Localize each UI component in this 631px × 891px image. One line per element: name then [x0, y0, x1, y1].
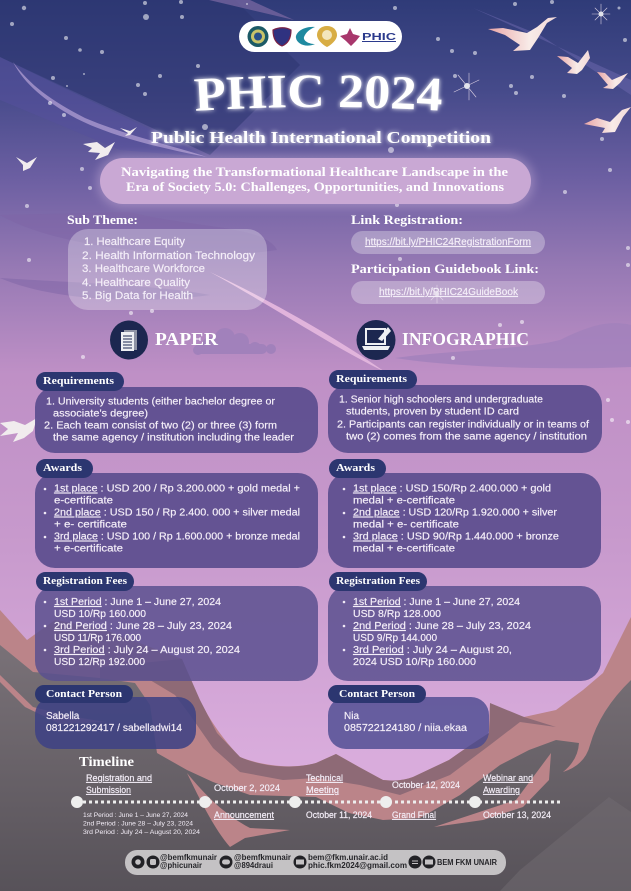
- sub theme list: 3. Healthcare Workforce: [82, 263, 205, 275]
- panel: paper contact person: Sabella: [46, 711, 80, 722]
- panel: infographic registration fees: USD 9/Rp 144.000: [353, 633, 437, 644]
- milestone: technical meeting: October 11, 2024: [306, 810, 372, 820]
- footer social bar: [125, 850, 506, 875]
- timeline: [71, 754, 560, 836]
- milestone: registration and submission: 1st Period : June 1 – June 27, 2024: [83, 813, 189, 819]
- registration fees tag: Registration Fees: [336, 575, 421, 587]
- registration fees tag: Registration Fees: [43, 575, 128, 587]
- panel: infographic requirements: 1. Senior high schoolers and undergraduate: [339, 394, 543, 406]
- sub theme list: 5. Big Data for Health: [82, 290, 193, 302]
- milestone: announcement: [214, 783, 280, 820]
- registration link pill: [351, 231, 545, 254]
- social handles: @bemfkmunair: [234, 853, 291, 862]
- social icons: [132, 856, 436, 868]
- panel: paper registration fees: [35, 572, 318, 681]
- panel: paper registration fees: USD 11/Rp 176.000: [54, 633, 141, 644]
- registration fees tag: [36, 572, 134, 591]
- logo: PHIC wordmark: PHIC: [362, 32, 396, 43]
- panel: infographic registration fees: 2024 USD 10/Rp 160.000: [353, 657, 476, 668]
- logo: shield: [273, 28, 291, 46]
- panel: paper registration fees: 2nd Period : June 28 – July 23, 2024: [54, 621, 232, 632]
- panel: infographic registration fees: 1st Period : June 1 – June 27, 2024: [353, 597, 520, 608]
- guidebook link pill: [351, 281, 545, 304]
- milestone: webinar and awarding: October 13, 2024: [483, 810, 551, 820]
- milestone: technical meeting: Meeting: [306, 785, 339, 795]
- heading: infographic: INFOGRAPHIC: [402, 329, 529, 349]
- milestone: webinar and awarding: Awarding: [483, 785, 520, 795]
- logo strip: [239, 21, 402, 52]
- contact tag: Contact Person: [46, 688, 122, 700]
- panel: paper requirements: the same agency / institution including the leader: [53, 432, 295, 444]
- subtitle: Public Health International Competition: [151, 128, 492, 147]
- panel: infographic contact person: [328, 685, 489, 749]
- panel: infographic registration fees: 2nd Period : June 28 – July 23, 2024: [353, 621, 531, 632]
- milestone: registration and submission: [83, 773, 201, 836]
- panel: infographic awards: 2nd place : USD 120/Rp 1.920.000 + silver: [353, 508, 558, 518]
- panel: paper requirements: associate's degree): [53, 408, 148, 420]
- awards tag: [329, 459, 386, 478]
- panel: paper awards: [35, 459, 318, 568]
- registration link pill: https://bit.ly/PHIC24RegistrationForm: [365, 237, 531, 248]
- milestone: technical meeting: Technical: [306, 773, 343, 783]
- registration fees tag: [329, 572, 427, 591]
- requirements tag: [36, 372, 124, 391]
- panel: paper registration fees: 1st Period : June 1 – June 27, 2024: [54, 597, 221, 608]
- milestone: registration and submission: Submission: [86, 785, 131, 795]
- sub theme list: 4. Healthcare Quality: [82, 277, 191, 289]
- panel: infographic requirements: [328, 370, 602, 453]
- cloud: [193, 328, 276, 355]
- panel: infographic contact person: 085722124180 / niia.ekaa: [344, 723, 467, 734]
- sub theme: [67, 212, 267, 310]
- background swooshes: [0, 0, 631, 372]
- stars: [10, 0, 630, 424]
- theme banner: Era of Society 5.0: Challenges, Opportunities, and Innovations: [126, 180, 504, 194]
- milestone: registration and submission: Registration and: [86, 773, 152, 783]
- milestone: announcement: October 2, 2024: [214, 783, 280, 793]
- timeline heading: Timeline: [79, 754, 134, 769]
- awards tag: Awards: [43, 462, 83, 474]
- milestone: grand final: October 12, 2024: [392, 780, 460, 790]
- contact tag: Contact Person: [339, 688, 415, 700]
- title: PHIC 2024: [192, 72, 445, 114]
- milestone: registration and submission: 2nd Period : June 28 – July 23, 2024: [83, 822, 194, 828]
- panel: paper registration fees: 3rd Period : July 24 – August 20, 2024: [54, 645, 240, 656]
- contact tag: [35, 685, 133, 703]
- birds pink: [488, 17, 631, 133]
- panel: infographic awards: 1st place : USD 150/Rp 2.400.000 + gold: [353, 484, 551, 494]
- panel: infographic requirements: students, proven by student ID card: [346, 406, 519, 418]
- social handles: [160, 853, 497, 870]
- awards tag: [36, 459, 93, 478]
- milestone: grand final: [392, 780, 460, 820]
- logo: star: [340, 28, 360, 46]
- panel: infographic awards: medal + e- certificate: [353, 520, 459, 530]
- social handles: @phicunair: [160, 861, 202, 870]
- panel: infographic awards: medal + e-certificate: [353, 496, 455, 506]
- birds white: [0, 127, 137, 442]
- panel: paper awards: + e- certificate: [54, 520, 127, 530]
- panel: infographic requirements: 2. Participants can register individually or in teams of: [337, 420, 589, 430]
- guidebook heading: Participation Guidebook Link:: [351, 261, 539, 276]
- milestone: grand final: Grand Final: [392, 810, 436, 820]
- panel: paper awards: e-certificate: [54, 496, 113, 506]
- social handles: @894draui: [234, 861, 273, 870]
- icon: paper: [110, 320, 148, 360]
- panel: paper requirements: 2. Each team consist of two (2) or three (3) form: [44, 420, 277, 432]
- guidebook link pill: https://bit.ly/PHIC24GuideBook: [379, 287, 519, 298]
- panel: infographic awards: 3rd place : USD 90/Rp 1.440.000 + bronze: [353, 532, 559, 542]
- sub theme heading: Sub Theme:: [67, 212, 138, 227]
- sparkle stars: [428, 4, 610, 303]
- panel: infographic awards: [328, 459, 601, 568]
- awards tag: Awards: [336, 462, 376, 474]
- panel: infographic registration fees: [328, 572, 601, 681]
- requirements tag: Requirements: [43, 375, 115, 387]
- logo: wave: [296, 27, 315, 46]
- social handles: @bemfkmunair: [160, 853, 217, 862]
- panel: paper awards: 3rd place : USD 100 / Rp 1.600.000 + bronze medal: [54, 532, 300, 542]
- requirements tag: Requirements: [336, 373, 408, 385]
- panel: paper registration fees: USD 10/Rp 160.000: [54, 609, 146, 620]
- panel: paper contact person: 081221292417 / sabelladwi14: [46, 723, 182, 734]
- panel: infographic requirements: two (2) comes from the same agency / institution: [346, 432, 587, 442]
- milestone: webinar and awarding: [483, 773, 551, 820]
- panel: paper registration fees: USD 12/Rp 192.000: [54, 657, 145, 668]
- heading: paper: PAPER: [155, 329, 219, 349]
- links: [351, 212, 545, 304]
- theme banner: [97, 155, 534, 207]
- milestone: registration and submission: 3rd Period : July 24 – August 20, 2024: [83, 830, 201, 836]
- panel: paper requirements: 1. University students (either bachelor degree or: [46, 396, 276, 408]
- panel: paper requirements: [35, 372, 318, 453]
- icon: laptop: [356, 320, 396, 360]
- sub theme list: 1. Healthcare Equity: [84, 236, 186, 248]
- panel: paper contact person: [35, 685, 196, 749]
- panel: infographic registration fees: USD 8/Rp 128.000: [353, 609, 441, 620]
- link registration heading: Link Registration:: [351, 212, 463, 227]
- requirements tag: [329, 370, 417, 389]
- logo: map pin: [317, 26, 337, 47]
- timeline track: [71, 796, 560, 808]
- panel: infographic registration fees: 3rd Period : July 24 – August 20,: [353, 645, 512, 656]
- panel: paper awards: 2nd place : USD 150 / Rp 2.400. 000 + silver medal: [54, 508, 300, 518]
- social handles: bem@fkm.unair.ac.id: [308, 853, 388, 862]
- milestone: announcement: Announcement: [214, 810, 274, 820]
- sub theme list: [68, 229, 267, 310]
- social handles: BEM FKM UNAIR: [437, 858, 497, 867]
- panel: paper awards: 1st place : USD 200 / Rp 3.200.000 + gold medal +: [54, 484, 300, 494]
- logo: university seal: [248, 26, 268, 47]
- mountains: [0, 610, 631, 891]
- panel: paper awards: + e-certificate: [54, 544, 123, 554]
- panel: infographic contact person: Nia: [344, 711, 359, 722]
- contact tag: [328, 685, 426, 703]
- milestone: technical meeting: [306, 773, 372, 820]
- theme banner: Navigating the Transformational Healthcare Landscape in the: [121, 165, 509, 179]
- social handles: phic.fkm2024@gmail.com: [308, 861, 407, 870]
- sub theme list: 2. Health Information Technology: [82, 250, 256, 262]
- panel: infographic awards: medal + e-certificate: [353, 544, 455, 554]
- milestone: webinar and awarding: Webinar and: [483, 773, 533, 783]
